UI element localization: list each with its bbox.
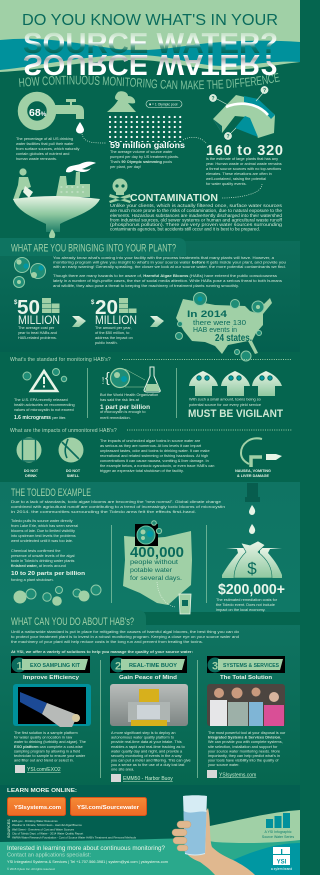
text: EPA advisory: health advisories on recommending [14,403,75,407]
text: toledo left column: went undetected until it was too late. [11,539,73,543]
text: gallons: per plant, per day! [110,165,141,169]
text: sources [7,819,137,840]
divider [99,660,102,778]
text: gallons [110,150,179,169]
map: US HAB events: HAB events in [193,327,237,334]
banner: exo sampling kit: 1 [16,660,23,672]
arrow: tap to gallons [82,134,106,143]
icon: bar chart series badge [262,813,294,839]
text: impacts: unpleasant tastes, odor and toxins to drinking water. It can make [100,449,210,453]
icon: cell to flask [101,367,160,392]
link: systems [207,770,256,778]
text: systems description: The most powerful tool at your disposal is our [208,731,286,735]
heading: what can you do: WHAT CAN YOU DO ABOUT HAB's? [11,616,134,628]
heading: contamination: CONTAMINATION [130,193,218,204]
logo: YSI xylem brand [271,847,292,871]
header band [0,0,300,100]
heading: toledo example: THE TOLEDO EXAMPLE [11,487,91,499]
logo: YSI xylem brand: a xylem brand [271,867,292,871]
text: EPA advisory: 1.6 micrograms per liter. [14,415,66,421]
text: EPA advisory: The U.S. EPA recently released [14,398,68,402]
text: impacts: as serious as they are numerous. At low levels it can impart [100,444,202,448]
text: WHO [100,393,158,420]
text: toledo intro: combined with agricultural runoff are contributing to a trend of increasingly toxic blooms of microcystin [11,505,225,509]
banner: exo sampling kit: EXO SAMPLING KIT [30,663,80,669]
icon: pipe with question marks: ? [211,96,215,102]
text: 160 to 320: year. Human waste or animal waste remains [206,162,282,166]
text: systems description [208,731,286,767]
text: WHO: 1 part per billion [100,404,150,411]
icon: cell to flask: 1 cell [101,377,105,384]
text: 68 percent: The percentage of all US drinking [16,137,73,141]
text: 160 to 320: well-contained, raising the potential [206,177,266,181]
logo: YSI xylem brand: YSI [277,860,287,866]
map: ohio 400,000 people: potable water [130,567,173,574]
icon: bar chart series badge: Source Water Series [262,835,294,839]
icon: hand holding glass [172,795,255,875]
map: US HAB events: 24 states. [215,333,252,344]
panel: 68 percent tap [22,96,84,134]
text: what can you do intro: At YSI, we offer a variety of solutions to help you manage the quality of your source water: [11,650,193,654]
photo: exo sonde [13,684,91,727]
text: toledo left column: from Lake Erie, which has seen several [11,524,78,528]
arrow: chevron one [72,316,86,327]
stat: 20 million: of the $50 million, to [95,331,129,335]
text: 160 to 320 [206,157,282,186]
text: 68 percent: water facilities that pull their water [16,142,74,146]
text: contamination: from industrial sources, old sewer systems or human and agricultural waste runoff [110,218,283,222]
button: ysi source water: YSI.com/Sourcewater [77,805,140,811]
text: must be vigilant: potential source for our every yield service [189,403,261,407]
text: intro bringing: lately in a number of high-profile cases, the rise of social media attention. While HABs pose a serious threat to both humans [53,279,282,283]
stat: 59 million gallons: 59 million gallons [110,141,186,150]
text: intro bringing: with an early warning! Generally speaking, the closer we look at our source water, the more potential contaminants we find. [53,265,286,269]
map: ohio 400,000 people: for several days. [130,575,182,582]
icon: do not smell: DO NOT [66,469,81,473]
text: sources: Weather & Climate, NOAA News - Harmful Algal Blooms [12,823,82,827]
text: exo description: sampling program by allowing in a field [14,750,80,754]
legend: olympic pool pill: ■ = 1 Olympic pool [149,102,178,106]
title: source water reflection [23,28,278,80]
text: toledo left column: Chemical tests confirmed the [11,549,61,553]
text: remediation: impact on the local economy. [216,608,266,612]
text: systems description: your source water. [208,763,239,767]
arrow: chevron two [150,316,164,327]
text: buoy description: one site area. [111,768,134,772]
icon: do not drink: DO NOT [24,469,39,473]
text: must be vigilant [188,398,283,420]
text: exo description: for water quality on location in raw [14,736,72,740]
heading: what are you bringing: WHAT ARE YOU BRINGING INTO YOUR PLANT? [11,242,176,254]
text: 68 percent: from surface sources, which naturally [16,147,80,151]
chart: pools of water dots [109,114,183,142]
text: intro bringing: and wildlife, they also pose a threat to keeping the machinery of treatment plants running smoothly. [53,284,239,288]
text: 68 percent: contain globules of nutrient and [16,152,69,156]
title: DO YOU KNOW WHAT'S IN YOUR [22,12,278,29]
stat: 200,000+: $200,000+ [218,582,285,598]
text: call to action: YSI Integrated Systems & Services | Tel +1.707.566.3981 | system@ysi.com | ysisystems.com [7,859,168,864]
text: 160 to 320: a threat source sources with no top-sections [206,167,281,171]
icon: head with nausea: & LIVER DAMAGE [237,474,270,478]
text: contamination: Unlike your clients, which is actually filtered once, surface water sources [110,203,282,208]
stat: 20 million: MILLION [95,315,137,327]
button: ysisystems: YSIsystems.com [14,805,61,811]
text: toledo intro [11,500,225,514]
divider [196,660,199,778]
text: remediation: the Toledo event. Does not include [216,603,275,607]
subtitle: HOW CONTINUOUS MONITORING CAN MAKE THE DIFFERENCE [18,72,280,90]
text: sources: City of Toledo Dept. of Water - 2014 Water Quality Report [12,832,83,836]
text: toledo left column: toxin in Toledo's drinking water plants [11,559,75,563]
text: sources: Wall Street - Overview of Cost and Water Sources [12,828,75,832]
text: toledo left column [11,519,85,582]
icon: do not drink [16,438,42,478]
text: toledo left column: presence of unsafe levels of the algal [11,554,75,558]
icon: bar chart series badge: A YSI Infographic [265,830,292,834]
text: systems description: your tools have visibility into the quality of [208,758,279,762]
text: systems description: site selection, installation and support for [208,745,278,749]
text: contamination: elements. Hazardous substances are inadvertently discharged into their watershed [110,213,283,218]
map: US HAB events: there were 130 [193,320,246,327]
text: impacts: trigger an expensive total shutdown of the facility. [100,469,184,473]
stat: 160 to 320: 160 to 320 [206,143,283,159]
stat: 50 million: 50 [17,297,40,319]
illustration: person and factory over funnel [13,162,100,239]
banner: exo sampling kit [11,656,90,673]
text: call to action: © 2015 Xylem Inc. All rights reserved. [7,867,55,871]
stat: 50 million: year to treat HABs and [18,331,57,335]
text: exo description: and filter out and blend or select in. [14,758,74,762]
text: toledo left column: finished water, at levels around [11,564,66,568]
title: source water reflection: SOURCE WATER? [23,28,278,60]
text: call to action: Interested in learning more about continuous monitoring? [7,845,165,852]
text: buoy description: A more significant step is to deploy an [111,731,176,735]
banner: real-time buoy: 2 [115,660,121,672]
button: ysi source water [70,798,146,816]
text: WHO: has said the risk lies at [100,398,140,402]
divider [175,368,178,418]
panel: toledo example [0,482,300,612]
link: exo [15,765,61,773]
banner: systems and services: SYSTEMS & SERVICES [223,663,280,669]
stat: 50 million: HAB-related problems. [18,336,57,340]
stat: 20 million: The amount per year, [95,326,132,330]
text: what can you do intro: Until a nationwide standard is put in place for mitigating the causes of harmful algal blooms, the best thing you can do [11,630,239,634]
icon: do not smell: SMELL [67,474,80,478]
icon: water glass with sad face [179,594,191,614]
stat: 20 million: address the impact on [95,336,133,340]
text: contamination [110,203,283,232]
panel: what are you bringing section [0,238,300,352]
stat: 50 million: MILLION [18,315,60,327]
map: ohio 400,000 people: people without [130,559,178,566]
text: toledo left column: blooms of late. Due to limited visibility [11,529,75,533]
subhead: the total solution: The Total Solution [220,675,273,681]
text: contamination: are much more prone to the risks of contamination, due to natural exposure to the [110,208,283,213]
text: buoy description: security monitoring of events in the a way [111,754,182,758]
text: exo description [14,731,86,762]
text: systems description: We can provide you with complete systems, [208,740,283,744]
stat: 20 million: public health. [95,341,118,345]
text: systems description: your source water monitoring needs. More [208,750,280,754]
map: ohio 400,000 people: 400,000 [130,545,184,561]
text: must be vigilant: With such a small amount, toxins being so [189,398,261,402]
text: toledo intro: in 2014. the communities surrounding the Toledo area felt the effects first-hand. [11,510,196,514]
link: exo: YSI.com/EXO2 [27,767,61,773]
icon: algae bubbles [14,258,46,288]
text: toledo left column: forcing a plant shutdown. [11,578,54,582]
link: buoy: EMM50 - Harbor Buoy [123,776,173,782]
icon: head with nausea: NAUSEA, VOMITING [235,469,271,473]
icon: pipe with question marks: ? [263,88,266,94]
icon: shower head [107,91,136,112]
text: buoy description: you a sense as to the use of a duly lost last [111,763,185,767]
link: buoy [111,774,173,782]
map: US HAB events [176,292,272,361]
divider [205,525,208,603]
arrow: to contamination [222,184,262,198]
arrow: gallons to pipe [183,137,206,143]
photo: buoy [110,684,188,726]
text: systems description: Integrated Systems & Services Division. [208,736,281,740]
stat: 50 million: $ [14,300,18,306]
subhead: gain peace of mind: Gain Peace of Mind [119,675,178,681]
icon: money bags: $ [247,559,257,578]
panel: what can you do [0,610,300,790]
divider [110,525,113,603]
text: exo description: The first solution is a sample platform [14,731,78,735]
text: 160 to 320: elevates. These elevations are often in [206,172,272,176]
text: call to action: Contact an applications specialist: [7,852,91,858]
text: intro bringing: You already know what's coming into your facility with the process treatments that many plants will have. However, a [53,256,275,260]
text: toledo left column: into upstream test levels the problems [11,534,76,538]
text: buoy description: water quality day and night, and provide a [111,750,183,754]
text: gallons: That's 90 Olympic swimming pools [110,160,172,164]
text: impacts: the example below, a nontoxic cyanotoxin, or even trace HAB's can [100,464,214,468]
text: remediation [216,598,278,612]
icon: do not smell [58,438,84,478]
button: ysisystems [8,798,66,816]
map: US HAB events: In 2014 [187,309,227,319]
text: gallons: The average volume of source water [110,150,173,154]
text: remediation: The estimated remediation costs for [216,598,278,602]
text: sources: EPA.gov - Drinking Water Resources [12,819,58,823]
text: toledo left column: Toledo pulls its source water directly [11,519,73,523]
stat: 20 million [91,297,137,345]
text: intro bringing [53,256,286,288]
text: toledo left column: 10 to 20 parts per billion [11,571,85,577]
divider [86,368,89,418]
text: buoy description: enables a rapid and real-time tracking as to [111,745,185,749]
heading: standard for monitoring: What's the standard for monitoring HAB's? [10,357,111,363]
text: 160 to 320: for water quality events. [206,182,247,186]
stat: 50 million [14,297,60,340]
text: WHO: merit remediation. [100,416,131,420]
text: call to action [7,845,168,871]
photo: team [207,684,285,726]
text: 160 to 320: is the estimate of large plants that has any [206,157,278,161]
text: WHO: But the World Health Organization [100,393,158,397]
heading: learn more online: LEARN MORE ONLINE: [7,788,77,794]
text: EPA advisory: values of microcystin to not exceed [14,408,74,412]
text: impacts: The impacts of unchecked algae toxins in source water are [100,439,200,443]
text: what can you do intro [11,630,239,654]
text: toledo intro: Due to a lack of standards, toxic algae blooms are becoming the "new normal". Global climate change [11,500,221,504]
text: contamination: contaminants agencies, but accidents still occur and it is best to be prepared. [110,226,260,232]
text: what can you do intro: the machinery of your plant will help reduce costs in the long run and prevent from treating the toxins. [11,640,203,644]
icon: skull and crossbones [109,178,131,203]
text: buoy description: you can put a meter and filtering. This can give [111,758,191,762]
text: exo description: technician to sample to ensure your water [14,754,86,758]
text: EPA advisory [14,398,75,421]
stat: 50 million: The average cost per [18,326,55,330]
icon: head with nausea [235,438,282,478]
text: intro bringing: monitoring program will give you insight to what's in your source water before it gets inside your plant, and provide you [53,260,286,264]
text: buoy description [111,731,191,772]
icon: skull bubbles [14,585,101,606]
text: exo description: water to drinking (turbidity and algae). The [14,740,86,744]
text: contamination: (phosphorus pollution). There are very proven water sources surrounding [110,222,283,227]
text: buoy description: provide real-time data at your intake. This [111,740,182,744]
icon: people with binoculars [189,371,282,396]
text: WHO: of microcystin is enough to [100,410,146,414]
icon: cell to flask: { [105,369,110,385]
icon: warning triangle [23,368,67,391]
icon: money bags [222,541,282,578]
icon: dripping tap [245,483,260,534]
heading: impacts of unmonitored: What are the impacts of unmonitored HAB's? [10,428,117,434]
banner: systems and services [207,656,285,673]
text: gallons: pumped per day by US treatment plants. [110,155,179,159]
text: sources: AWWA Water Research Foundation - Cost of Source Water HAB's Treatment and Removal Methods [12,836,137,840]
text: impacts: recreational and related swimming or fishing hazardous. At high [100,454,208,458]
text: buoy description: autonomous water quality platform to [111,736,174,740]
text: impacts [100,439,214,473]
link: systems: YSIsystems.com [219,772,256,778]
legend: olympic pool pill [146,100,182,108]
icon: pipe with question marks: ? [226,134,230,140]
text: must be vigilant: MUST BE VIGILANT [188,408,283,420]
text: what can you do intro: to protect your treatment plant is to invest in a robust monitoring program. Keeping a close eye on your source water and [11,635,239,639]
banner: systems and services: 3 [212,660,218,672]
banner: real-time buoy: REAL-TIME BUOY [129,663,178,669]
stat: 20 million: $ [91,300,95,306]
banner: real-time buoy [110,656,187,673]
map: ohio 400,000 people [123,521,192,607]
panel: 68 percent tap: 68% [29,107,47,119]
text: exo description: EXO platform can complete a cost-wise [14,745,83,749]
text: impacts: concentrations it can cause nausea, vomiting & liver damage. In [100,459,209,463]
text: systems description: importantly, they can help predict what's in [208,754,280,758]
text: sources: SOURCES [7,819,11,838]
icon: do not drink: DRINK [25,474,37,478]
text: intro bringing: Though there are many hazards to be aware of, Harmful Algae Blooms (HABs) have entered the public consciousness [53,274,277,278]
icon: pipe with question marks [209,86,275,140]
text: 68 percent [16,137,80,161]
footer background [0,785,300,875]
text: 68 percent: human waste remnants. [16,157,57,161]
title: source water reflection: SOURCE WATER? [23,48,278,80]
stat: 20 million: 20 [95,297,118,319]
subhead: improve efficiency: Improve Efficiency [23,675,80,681]
